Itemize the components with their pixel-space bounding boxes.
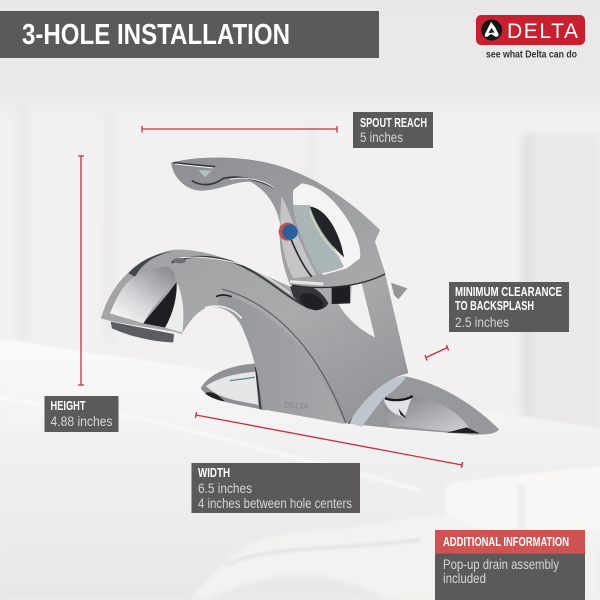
faucet: right base plate: [347, 376, 499, 435]
handle left chrome: [280, 197, 317, 278]
label: minimum clearance to backsplash: 2.5 inches: [455, 315, 509, 330]
label: minimum clearance to backsplash: MINIMUM CLEARANCE: [455, 285, 562, 299]
faucet: body and spout: [101, 250, 408, 423]
logo mark: [481, 20, 502, 40]
faucet: spout chrome highlight: [110, 252, 310, 333]
panel: additional information: Pop-up drain assembly: [443, 557, 559, 572]
faucet: aerator: [111, 322, 174, 342]
label: height: 4.88 inches: [50, 414, 113, 429]
width measurement line: [196, 412, 462, 468]
faucet: engraved logo: DELTA: [284, 400, 310, 411]
spout reach measurement line: [142, 126, 337, 132]
handle mirror: [293, 183, 360, 275]
label: width: WIDTH: [198, 466, 230, 480]
faucet: left base plate: [201, 363, 265, 411]
logo: DELTA: [507, 20, 578, 43]
label: spout reach: [353, 112, 433, 148]
label: width: [192, 463, 360, 513]
soap bar: [445, 466, 600, 540]
panel: additional information: included: [443, 571, 486, 586]
label: spout reach: SPOUT REACH: [360, 116, 427, 130]
clearance measurement line: [425, 345, 448, 360]
faucet: drain lift tab: [391, 283, 407, 299]
label: width: 6.5 inches: [198, 481, 252, 496]
panel: additional information: [435, 530, 585, 600]
faucet: [101, 157, 499, 435]
handle hot/cold indicator: [279, 223, 297, 241]
logo: see what Delta can do: [486, 48, 577, 60]
faucet: handle: [171, 157, 385, 288]
logo: [476, 15, 585, 60]
handle lower line: [292, 274, 385, 288]
faucet: lower body panel: [217, 293, 345, 424]
label: minimum clearance to backsplash: [449, 282, 569, 332]
label: height: HEIGHT: [50, 399, 86, 413]
title banner: 3-HOLE INSTALLATION: [22, 19, 290, 51]
height measurement line: [78, 156, 84, 385]
label: width: 4 inches between hole centers: [198, 496, 352, 511]
faucet: stem collar and junction: [290, 283, 375, 337]
label: height: [44, 396, 118, 432]
handle tip detail: [173, 163, 275, 188]
faucet: body edge line: [222, 289, 346, 423]
towel: [190, 515, 600, 600]
additional information heading: [435, 530, 585, 554]
label: spout reach: 5 inches: [360, 130, 403, 145]
label: minimum clearance to backsplash: TO BACKSPLASH: [455, 299, 534, 313]
title banner: [0, 11, 379, 58]
